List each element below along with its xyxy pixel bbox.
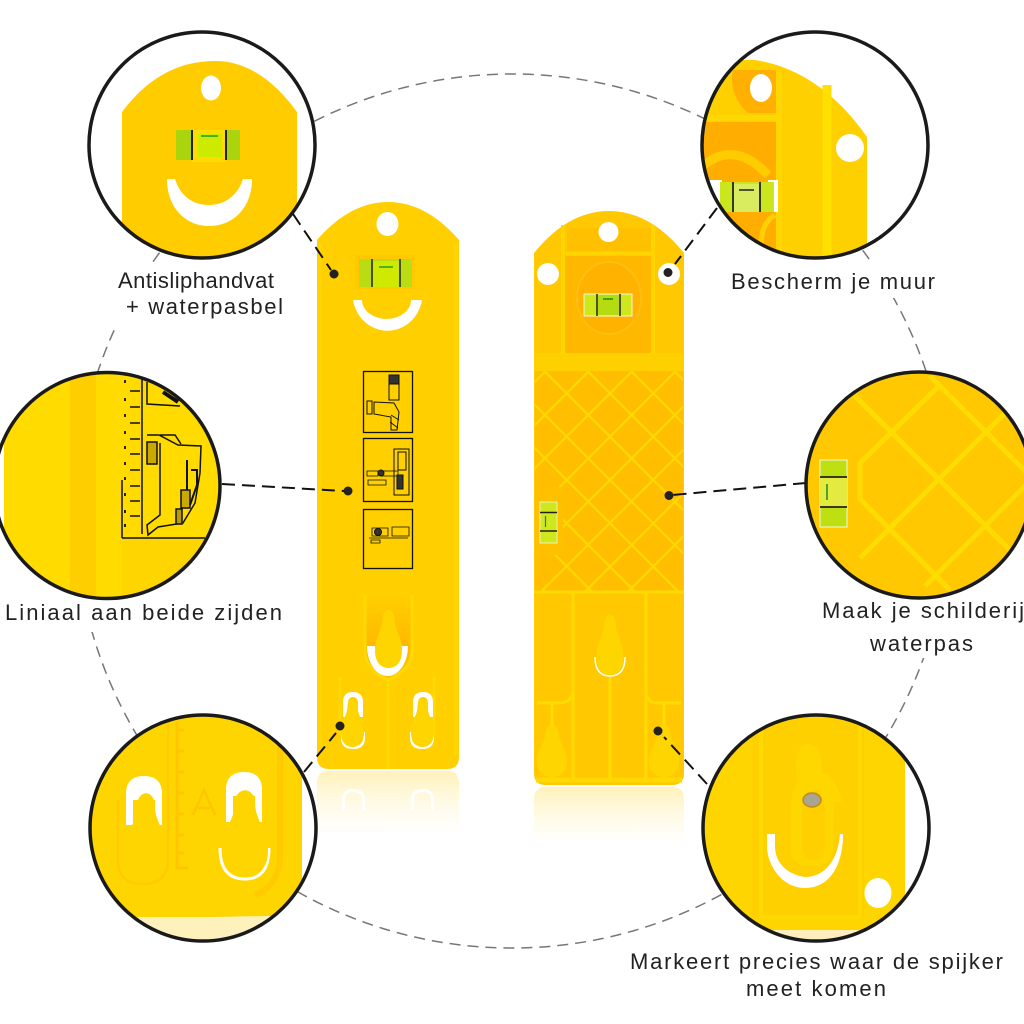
callout leader: bottom right [654, 726, 707, 784]
front body [317, 202, 459, 769]
back body [534, 211, 684, 785]
label backing: left lower [0, 598, 290, 632]
mounting holes [537, 222, 680, 285]
instruction pictogram 1 [364, 372, 412, 432]
callout leader: middle right [664, 483, 806, 500]
front reflection [317, 771, 459, 835]
smile handle cut-out [353, 300, 422, 331]
label: anti-slip handle: Antisliphandvat [118, 268, 274, 293]
label: level painting: Maak je schilderij [822, 598, 1024, 623]
top hole [376, 212, 398, 236]
lower rib structure [534, 592, 684, 778]
instruction line art [147, 382, 201, 535]
small hanger slot left [341, 692, 365, 749]
small hanger slot right [410, 692, 434, 749]
label backing: right lower [815, 596, 1024, 658]
back lower-right keyhole [649, 725, 679, 777]
horizontal band [534, 353, 684, 371]
magnified ribs [118, 722, 168, 884]
zoom circle: nail marker [700, 712, 929, 944]
label backing: right upper [725, 262, 945, 298]
marker tip [796, 744, 822, 785]
ruler marks [122, 378, 205, 538]
diamond lattice [535, 371, 683, 590]
back lower-left keyhole [537, 725, 567, 777]
white U cut-out [767, 834, 843, 888]
label: marks the nail: meet komen [746, 976, 886, 1001]
label: anti-slip handle: + waterpasbel [126, 294, 283, 319]
zoom circle: protect your wall [695, 32, 928, 270]
magnified body [4, 370, 220, 602]
callout leader: bottom left [304, 722, 344, 772]
callout leader: middle left [222, 484, 352, 496]
magnified ribs [695, 72, 779, 270]
lower hole [864, 878, 892, 908]
zoom circle: hanging slots [85, 710, 316, 947]
right slot [220, 772, 269, 879]
instruction pictogram 3 [364, 510, 412, 568]
pale reflection [772, 930, 860, 940]
product: front of the tool [317, 202, 459, 835]
back spirit level [584, 294, 632, 316]
magnified level [705, 180, 778, 212]
label: ruler: Liniaal aan beide zijden [5, 600, 282, 625]
instruction pictogram 2 [364, 438, 412, 502]
zoom circle: lattice and side level [800, 365, 1024, 605]
lower body edge [536, 778, 682, 782]
magnified hole [201, 76, 221, 100]
slot outline [791, 772, 842, 866]
magnified body [700, 712, 905, 930]
magnified smile [167, 179, 252, 226]
magnified body [808, 374, 1024, 596]
callout leader: top right [664, 208, 717, 277]
spirit level [355, 255, 415, 289]
magnified level [176, 130, 240, 162]
magnified lattice [855, 376, 1024, 590]
magnified body [85, 710, 302, 918]
back reflection [534, 787, 684, 845]
magnified holes [750, 74, 772, 102]
label backing: left upper [80, 262, 310, 324]
label: level painting [822, 598, 1024, 656]
left slot [126, 776, 162, 825]
main hanger slot [340, 595, 434, 769]
magnified body [706, 60, 867, 256]
label: level painting: waterpas [869, 631, 973, 656]
dashed connecting ring [75, 74, 949, 948]
label: marks the nail: Markeert precies waar de spijker [630, 949, 1003, 974]
embossed letter [193, 790, 215, 815]
back centre keyhole [595, 615, 625, 676]
product: back of the tool [534, 211, 684, 834]
upper recess [563, 225, 653, 353]
label: protect wall: Bescherm je muur [731, 269, 935, 294]
pale reflection [136, 917, 270, 940]
steel nail [803, 793, 821, 807]
side spirit level [535, 487, 563, 555]
label: marks the nail [630, 949, 1003, 1001]
magnified ruler [177, 722, 188, 868]
callout leader: top left [293, 214, 338, 278]
zoom circle: ruler on both sides [0, 370, 222, 602]
zoom circle: handle and level [89, 32, 315, 270]
label: anti-slip handle [118, 268, 283, 319]
magnified side level [820, 460, 847, 527]
magnified ribs [761, 712, 860, 917]
magnified body [122, 61, 297, 270]
